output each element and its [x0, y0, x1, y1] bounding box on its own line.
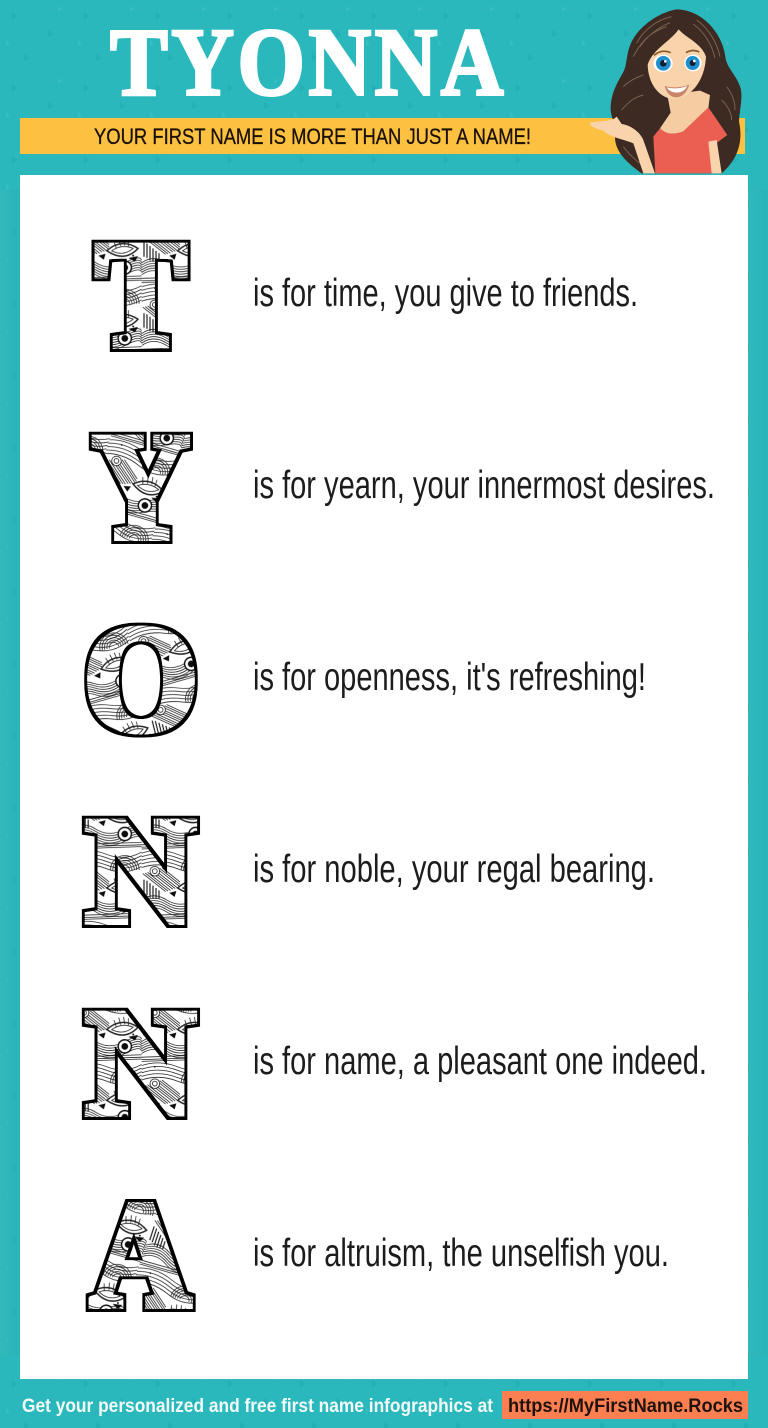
row 4: letter N	[86, 788, 655, 954]
red top	[653, 107, 727, 173]
zentangle letter N: N	[86, 788, 195, 954]
white content panel	[20, 175, 748, 1379]
row 1: letter T	[96, 212, 638, 378]
zentangle letter Y: Y	[93, 404, 189, 570]
row 5: letter N	[86, 980, 707, 1146]
zentangle letter T: T	[96, 212, 186, 378]
row 6: letter A	[91, 1172, 669, 1338]
row 1 text: is for time, you give to friends.	[253, 272, 638, 315]
arm and hand	[590, 117, 655, 173]
yellow banner	[20, 118, 745, 154]
zentangle letter N: N	[86, 980, 195, 1146]
footer link button: https://MyFirstName.Rocks	[508, 1396, 743, 1417]
row 3 text: is for openness, it's refreshing!	[253, 656, 646, 699]
face	[648, 29, 706, 99]
zentangle letter A: A	[91, 1172, 190, 1338]
zentangle letter O: O	[84, 596, 198, 762]
hair	[611, 9, 741, 173]
other arm	[708, 140, 722, 173]
smile	[665, 85, 689, 97]
character illustration	[590, 9, 741, 173]
row 2: letter Y	[93, 404, 715, 570]
banner text: YOUR FIRST NAME IS MORE THAN JUST A NAME!	[94, 124, 531, 149]
row 3: letter O	[84, 596, 646, 762]
footer text: Get your personalized and free first name infographics at	[22, 1396, 494, 1417]
right eye	[684, 55, 702, 71]
neck and chest	[660, 91, 710, 134]
eyebrows	[654, 50, 699, 55]
title: TYONNA	[110, 8, 507, 116]
left eye	[653, 55, 673, 72]
